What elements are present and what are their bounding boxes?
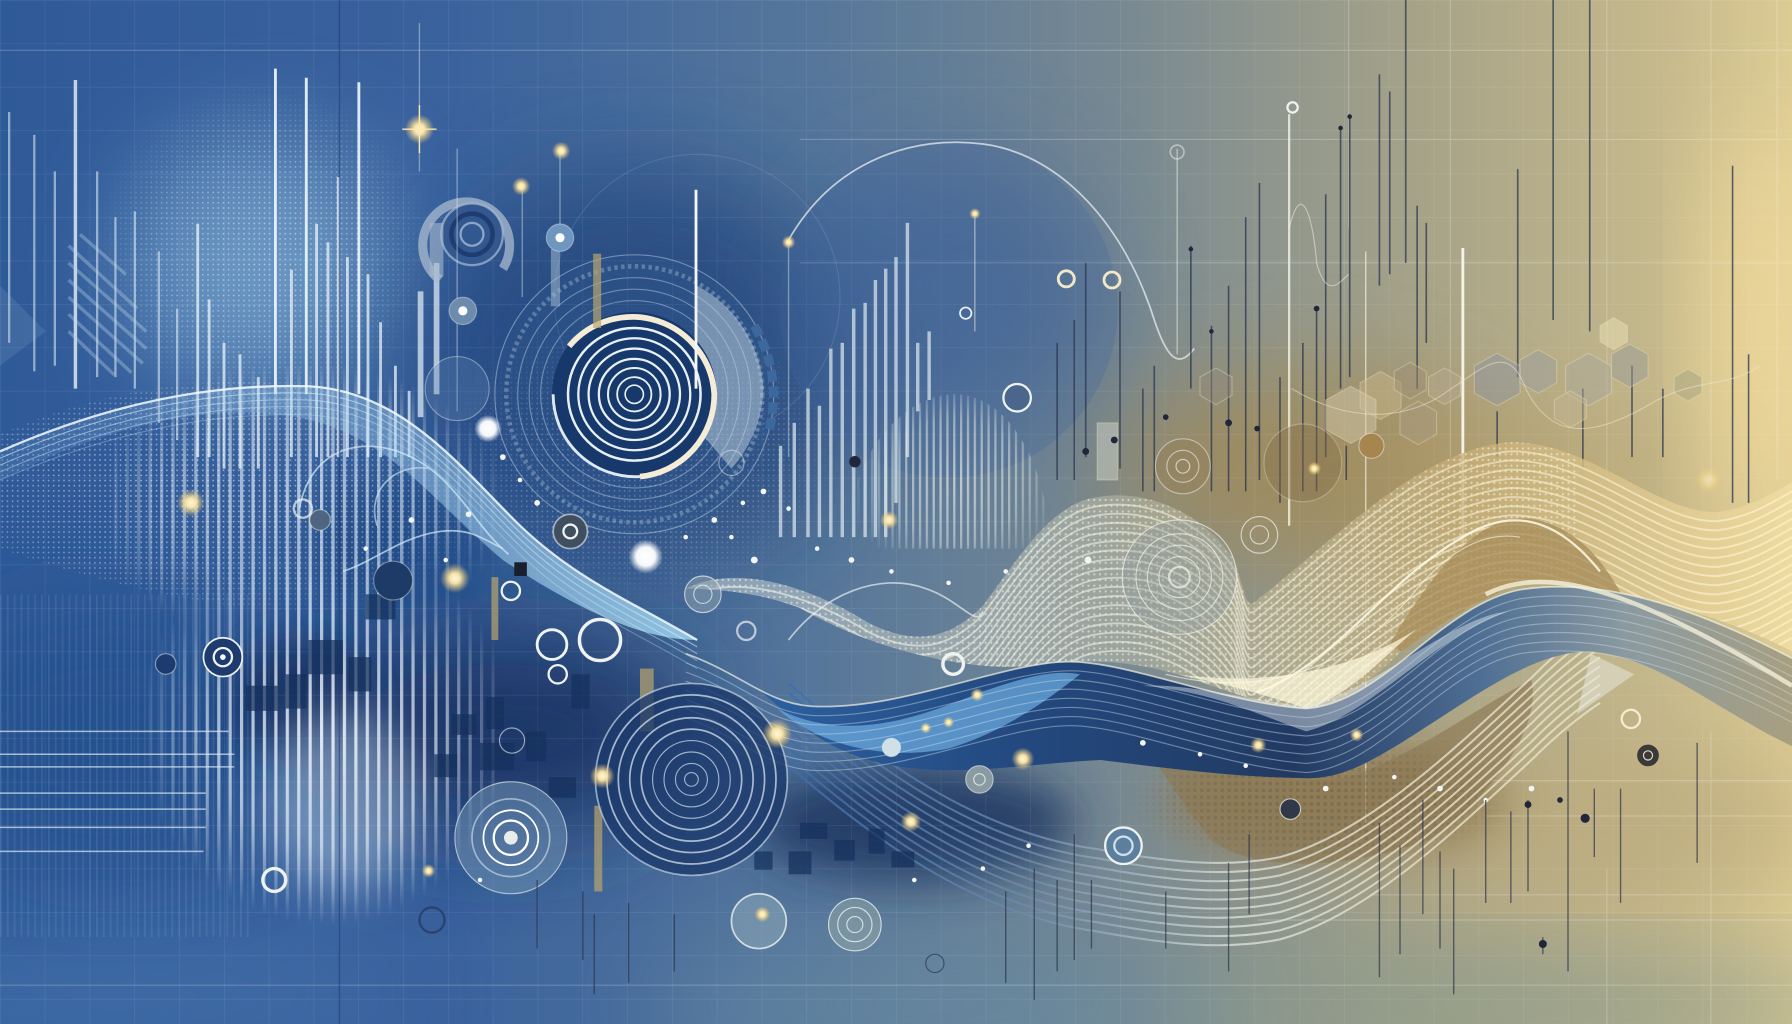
lower fan of curved lines [789, 621, 1600, 945]
vertical bars: centre [781, 223, 929, 537]
tan pocket with pixel texture [1143, 680, 1533, 864]
dark node dots [849, 114, 1590, 948]
small dots scatter [363, 454, 1534, 882]
dark pixel clusters: lower left [246, 562, 914, 874]
hexagon cluster: right [1097, 318, 1702, 480]
cream wave: dotted and lined [686, 442, 1792, 708]
striped arch: centre [846, 394, 1051, 549]
lower spiral [595, 683, 787, 875]
pixel texture in pocket [1173, 754, 1462, 852]
fine stripes: lower left field [0, 594, 251, 937]
hatch wedge: far left [0, 234, 146, 375]
ring medallion: cream wave [1122, 520, 1237, 634]
gold vertical tabs [491, 577, 654, 891]
main spiral [495, 255, 774, 534]
dark blue wave band [686, 582, 1792, 778]
pale fold at ribbon end [1577, 654, 1634, 714]
dotted wave: left [0, 382, 514, 612]
concentric rings: top emblem [423, 202, 510, 280]
pin lines: lower right and bottom [537, 731, 1697, 1000]
gold vertical accents near spiral [339, 0, 789, 1024]
white vertical beacon lines [975, 114, 1463, 823]
sparkle dust: left glow [100, 90, 424, 404]
thin connector curve: right [1291, 362, 1760, 429]
large translucent arc sphere [554, 139, 1194, 478]
ring medallion: lower left [455, 782, 567, 894]
thin vertical lines: upper right [1057, 0, 1749, 503]
grain texture around main spiral [450, 326, 826, 594]
stripes: lower left [149, 537, 503, 926]
light blue wave ribbon: left [0, 386, 697, 669]
vertical bars: upper left [9, 69, 437, 469]
small ring medallions [155, 102, 1658, 973]
glowing lights [177, 105, 1722, 922]
left end of cream wave: ring medallion arc [789, 583, 983, 640]
horizontal lines: lower left [0, 731, 234, 851]
stripes: mid left [114, 366, 503, 651]
